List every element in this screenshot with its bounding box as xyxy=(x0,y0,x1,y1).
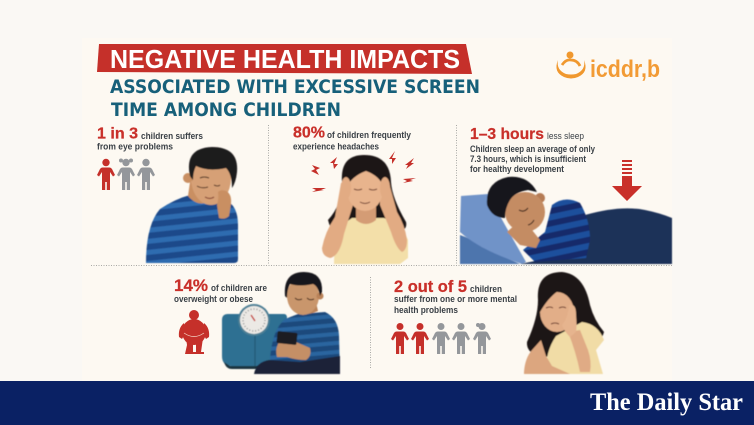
illustration: boy with phone xyxy=(254,272,340,374)
stat text: 1–3 hours: 1–3 hours xyxy=(470,126,544,143)
stat text: 1–3 hours xyxy=(470,126,595,174)
stat text: 1 in 3: from eye problems xyxy=(97,142,173,152)
stat text: 1 in 3: 1 in 3 xyxy=(97,126,138,142)
stat text: 80%: 80% xyxy=(293,124,325,142)
stat text: 1–3 hours: for healthy development xyxy=(470,164,564,174)
illustration: boy sleeping xyxy=(460,177,672,264)
stat text: 1–3 hours: less sleep xyxy=(547,131,584,141)
illustration: girl holding head xyxy=(322,155,408,264)
stat text: 2 out of 5: health problems xyxy=(394,305,458,315)
stat text: 14%: 14% xyxy=(174,276,208,295)
icon: people 1 of 3 red xyxy=(97,158,155,190)
panel: overweight xyxy=(174,272,340,374)
illustration: weighing scale xyxy=(222,304,287,369)
panel: headaches xyxy=(293,124,416,264)
subtitle: ASSOCIATED WITH EXCESSIVE SCREEN xyxy=(110,76,480,98)
The Daily Star wordmark: The Daily Star xyxy=(590,389,743,416)
illustration: sad girl xyxy=(524,272,604,374)
icddr,b logo: icddr,b xyxy=(590,56,660,83)
subtitle: TIME AMONG CHILDREN xyxy=(111,99,341,121)
stat text: 2 out of 5: 2 out of 5 xyxy=(394,278,467,296)
panel: mental health xyxy=(391,272,604,374)
icon: obese figure xyxy=(179,310,209,354)
stat text: 80%: experience headaches xyxy=(293,142,379,152)
illustration: boy rubbing eye xyxy=(146,147,238,263)
stat text: 14%: of children are xyxy=(211,283,267,293)
stat text: 1–3 hours: 7.3 hours, which is insufficient xyxy=(470,154,586,164)
stat text: 1–3 hours: Children sleep an average of only xyxy=(470,144,595,154)
stat text: 1 in 3: children suffers xyxy=(141,131,203,141)
stat text: 80%: of children frequently xyxy=(327,130,411,140)
icon: pain bolts xyxy=(311,151,416,192)
stat text: 1 in 3 xyxy=(97,126,203,152)
panel: eye problems xyxy=(97,126,238,263)
stat text: 2 out of 5: suffer from one or more mental xyxy=(394,294,517,304)
stat text: 14% xyxy=(174,276,267,304)
stat text: 2 out of 5 xyxy=(394,278,517,315)
infographic panel background xyxy=(82,38,672,381)
stat text: 14%: overweight or obese xyxy=(174,294,253,304)
stat text: 80% xyxy=(293,124,411,152)
footer band xyxy=(0,381,754,425)
panel: less sleep xyxy=(460,126,672,264)
icddr,b logo xyxy=(556,52,660,83)
title banner: NEGATIVE HEALTH IMPACTS xyxy=(110,44,460,74)
icon: people 2 of 5 red xyxy=(391,323,491,354)
subtitle xyxy=(110,76,480,121)
icon: down arrow xyxy=(612,160,642,201)
stat text: 2 out of 5: children xyxy=(470,284,502,294)
